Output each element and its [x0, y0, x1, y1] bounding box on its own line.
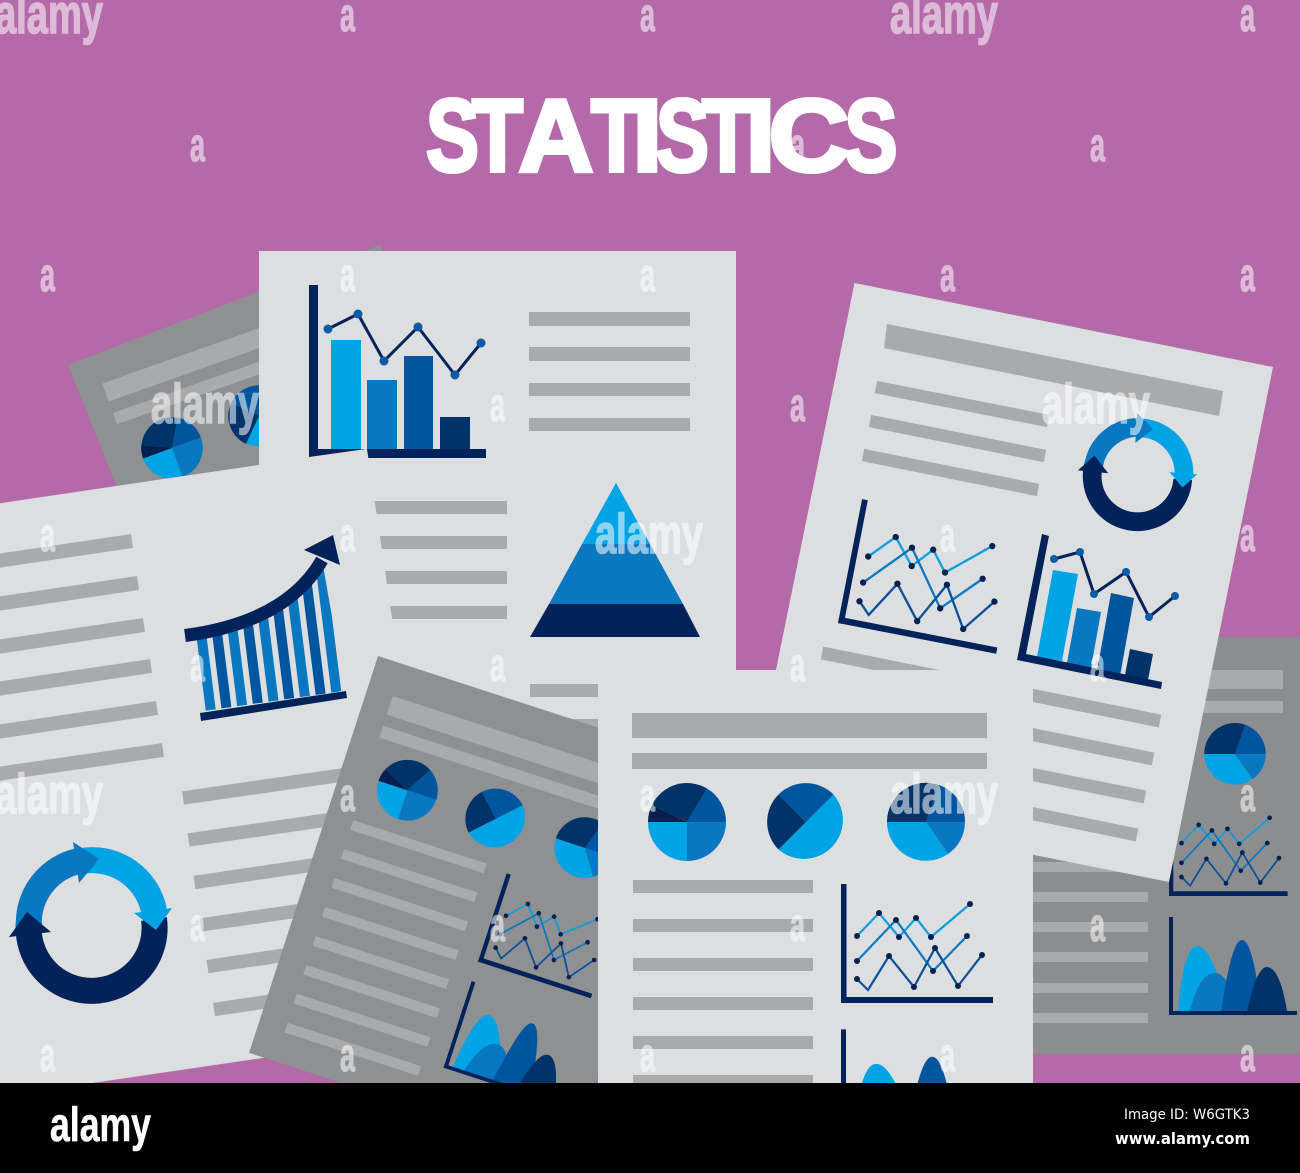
- watermark: a: [1240, 768, 1255, 821]
- watermark: a: [40, 1028, 55, 1081]
- title: I: [632, 78, 662, 193]
- watermark: a: [340, 768, 355, 821]
- text lines: upper left: [0, 541, 163, 775]
- watermark: a: [1090, 118, 1105, 171]
- pie chart: back right: [1204, 723, 1266, 785]
- watermark: a: [940, 508, 955, 561]
- text lines: body: [284, 820, 487, 1076]
- footer image id: Image ID: W6GTK3: [1124, 1107, 1250, 1123]
- text lines: upper: [863, 387, 1048, 490]
- text line: heading: [884, 324, 1223, 416]
- footer bar: [0, 1083, 1300, 1173]
- line chart: [841, 884, 993, 1003]
- title: T: [472, 78, 523, 193]
- bar and line chart: [1017, 534, 1179, 689]
- title: C: [768, 78, 850, 193]
- watermark: a: [790, 638, 805, 691]
- text lines: heading: [379, 696, 656, 823]
- growth chart with arrow: [184, 535, 347, 721]
- text lines: body: [1000, 862, 1148, 1023]
- watermark: a: [640, 768, 655, 821]
- watermark: a: [490, 898, 505, 951]
- panel: lower dark rotated document: [249, 656, 701, 1158]
- title: S: [426, 78, 479, 193]
- watermark: a: [790, 898, 805, 951]
- pie charts: [648, 783, 965, 861]
- text lines: middle: [340, 501, 507, 619]
- text lines: heading: [632, 713, 987, 769]
- watermark: a: [340, 248, 355, 301]
- area chart: [444, 981, 590, 1106]
- line chart: [838, 499, 1020, 654]
- watermark: a: [340, 508, 355, 561]
- text lines: upper right: [529, 312, 690, 431]
- watermark: a: [340, 1028, 355, 1081]
- watermark: a: [490, 378, 505, 431]
- panel: top centre document: [259, 251, 736, 901]
- pie chart: back document: [133, 409, 211, 487]
- watermark: alamy: [890, 762, 998, 825]
- title: S: [656, 78, 709, 193]
- title: T: [591, 78, 642, 193]
- watermark: a: [40, 248, 55, 301]
- area chart: [841, 1029, 1001, 1146]
- watermark: a: [940, 1028, 955, 1081]
- cycle arrows: small: [1070, 404, 1207, 533]
- text lines: header: [1200, 670, 1283, 713]
- watermark: a: [640, 248, 655, 301]
- panel: front bottom document: [598, 670, 1033, 1170]
- watermark: a: [790, 378, 805, 431]
- watermark: a: [1240, 508, 1255, 561]
- watermark: a: [1090, 638, 1105, 691]
- title: T: [702, 78, 753, 193]
- watermark: a: [490, 118, 505, 171]
- pyramid chart: [530, 483, 700, 637]
- watermark: alamy: [151, 372, 259, 435]
- area chart: back right: [1169, 917, 1297, 1015]
- text lines: back document header: [106, 336, 265, 418]
- watermark: alamy: [1042, 372, 1150, 435]
- watermark: alamy: [595, 502, 703, 565]
- panel: right rotated document: [750, 283, 1273, 882]
- cycle arrows: [9, 842, 172, 991]
- title: S: [844, 78, 898, 193]
- watermark: a: [1240, 248, 1255, 301]
- text lines: body: [633, 880, 813, 1088]
- title: A: [518, 78, 594, 193]
- watermark: a: [640, 1028, 655, 1081]
- watermark: a: [490, 638, 505, 691]
- watermark: a: [190, 118, 205, 171]
- pie chart: back document second: [220, 377, 296, 454]
- text lines: lower: [822, 653, 1160, 835]
- watermark: a: [940, 248, 955, 301]
- watermark: a: [190, 898, 205, 951]
- watermark: a: [1090, 898, 1105, 951]
- panel: right back document: [1000, 637, 1300, 1054]
- text lines: lower right: [183, 772, 394, 1010]
- line chart: back right: [1169, 802, 1288, 896]
- watermark: a: [40, 508, 55, 561]
- text lines: lower: [530, 684, 600, 732]
- panel: back document top left: [68, 245, 560, 820]
- panel: left document: [0, 449, 392, 1083]
- footer url: www.alamy.com: [1115, 1129, 1250, 1148]
- watermark: a: [190, 638, 205, 691]
- title: I: [746, 78, 776, 193]
- footer logo: alamy: [50, 1099, 151, 1152]
- bar and line chart: [309, 285, 486, 458]
- line chart: [478, 873, 619, 998]
- pie charts: [369, 752, 623, 886]
- watermark: a: [790, 118, 805, 171]
- watermark: a: [1240, 1028, 1255, 1081]
